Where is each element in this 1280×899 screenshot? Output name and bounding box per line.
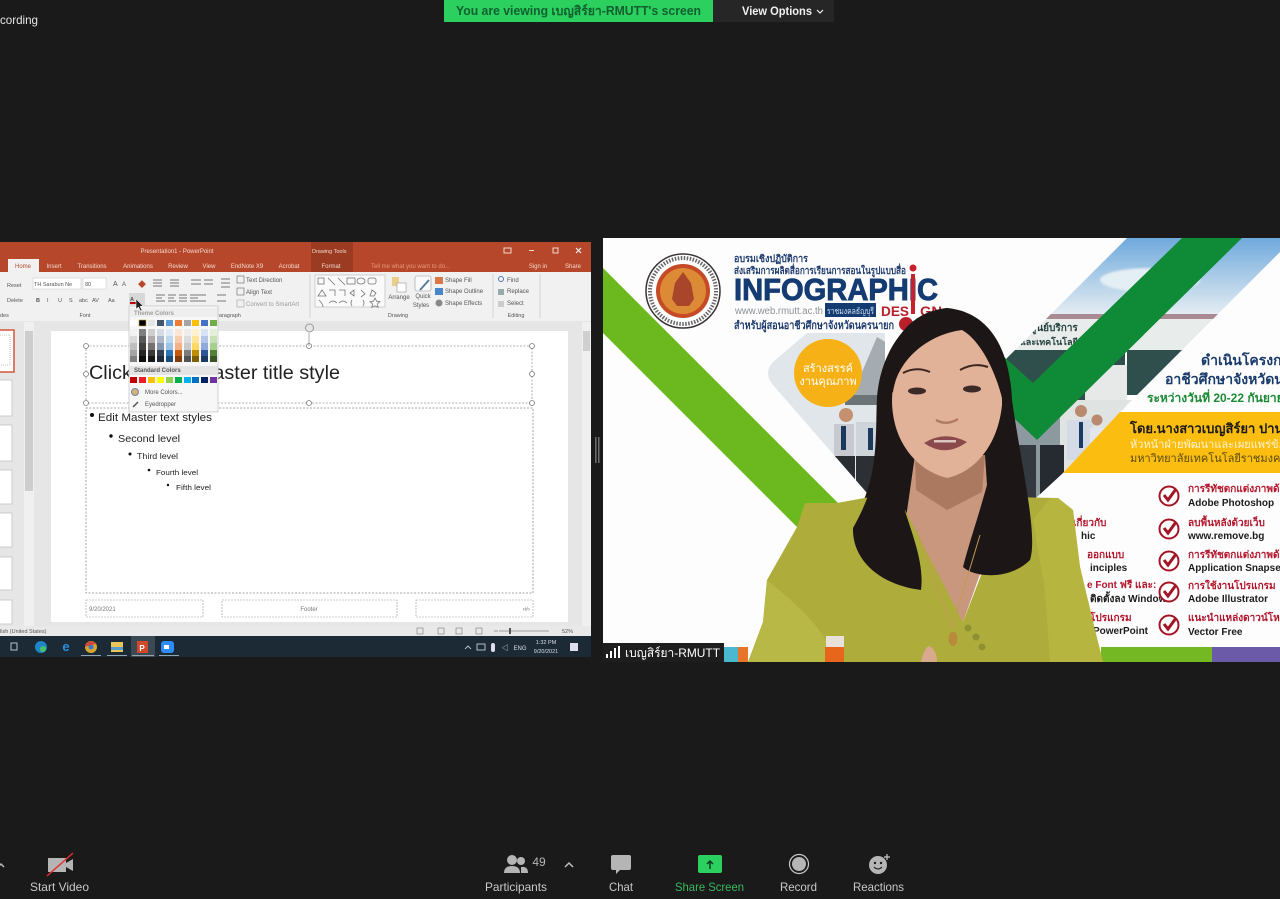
ribbon: Replace: [507, 289, 530, 295]
ribbon: AV: [92, 298, 99, 304]
participant name tag: เบญสิร์ยา-RMUTT: [625, 646, 721, 660]
toolbar: reactions: [853, 854, 904, 894]
toolbar: reactions: Reactions: [853, 880, 904, 894]
poster headline block: ส่งเสริมการผลิตสื่อการเรียนการสอนในรูปแบบสื่อ: [734, 263, 906, 278]
body placeholder: Fourth level: [156, 468, 198, 477]
body placeholder: [86, 408, 533, 593]
fringe: [884, 308, 1012, 400]
title bar and tabs: Share: [565, 264, 582, 270]
colour picker dropdown: More Colors...: [145, 390, 183, 396]
ribbon: Arrange: [388, 295, 410, 301]
poster topic list right column with check icons: ลบพื้นหลังด้วยเว็บ: [1188, 515, 1265, 529]
Windows taskbar: ENG: [513, 646, 527, 652]
paragraph icons: [153, 279, 230, 301]
title bar and tabs: Sign in: [529, 264, 547, 270]
colour picker dropdown: Theme Colors: [134, 311, 175, 317]
poster headline block: [734, 253, 942, 333]
neck and chest: [905, 455, 990, 622]
face: [892, 322, 1002, 478]
mouse cursor: [136, 299, 143, 311]
panel divider handle: [595, 437, 600, 463]
ribbon: Drawing: [388, 313, 408, 319]
theme colour row: [130, 320, 217, 326]
ribbon: Text Direction: [246, 278, 282, 284]
ribbon: des: [0, 313, 9, 319]
ribbon: U: [58, 298, 62, 304]
participant name tag: [603, 643, 724, 662]
poster college seal: [646, 254, 720, 328]
ribbon: TH Sarabun Ne: [34, 282, 72, 288]
footer placeholders: ‹#›: [523, 607, 530, 613]
poster photo band: building and students: [1006, 238, 1280, 498]
ribbon: Shape Fill: [445, 278, 472, 284]
title placeholder: [84, 324, 534, 406]
title bar and tabs: Format: [321, 264, 341, 270]
poster bottom colour strip: [724, 647, 1280, 662]
title bar and tabs: Home: [15, 264, 32, 270]
title bar and tabs: Review: [168, 264, 188, 270]
status bar: 52%: [562, 629, 573, 635]
toolbar: record: [780, 854, 817, 894]
ribbon: Paragraph: [215, 313, 241, 319]
Windows taskbar: P: [139, 644, 145, 653]
body placeholder: Fifth level: [176, 485, 212, 492]
toolbar: share screen: [675, 855, 744, 894]
poster topic list right column with check icons: Vector Free: [1188, 627, 1243, 638]
footer placeholders: Footer: [300, 607, 318, 613]
status bar: lish (United States): [0, 629, 47, 635]
title bar and tabs: [0, 242, 591, 272]
ribbon: Font: [79, 313, 91, 319]
Windows taskbar: e: [62, 639, 70, 654]
title bar and tabs: Animations: [123, 264, 153, 270]
toolbar: share screen: Share Screen: [675, 880, 744, 894]
poster topic list right column with check icons: [1160, 482, 1280, 638]
poster left photo with workers: [768, 333, 885, 492]
title bar and tabs: Tell me what you want to do...: [371, 264, 450, 270]
title bar and tabs: Insert: [46, 264, 62, 270]
hair back: [864, 308, 1002, 514]
body placeholder: Third level: [137, 451, 178, 461]
poster topic list left column: โปรแกรม: [1089, 611, 1132, 624]
poster topic list left column: ออกแบบ: [1087, 550, 1124, 561]
ribbon: Styles: [413, 303, 429, 309]
poster photo band: building and students: ศูนย์บริการ: [1030, 322, 1078, 335]
students in photo: [1019, 405, 1104, 498]
Windows taskbar: 1:32 PM: [536, 640, 557, 646]
poster yellow circle badge: งานคุณภาพ: [799, 376, 857, 388]
colour picker dropdown: [129, 306, 218, 412]
poster headline block: อบรมเชิงปฏิบัติการ: [734, 253, 809, 265]
poster topic list right column with check icons: www.remove.bg: [1187, 531, 1264, 542]
poster topic list left column: เกี่ยวกับ: [1073, 515, 1106, 529]
raised hand: [921, 646, 937, 662]
recording label: cording: [0, 13, 38, 27]
poster topic list right column with check icons: Adobe Illustrator: [1188, 594, 1268, 605]
poster yellow band: [1063, 412, 1280, 473]
ribbon: Align Text: [246, 290, 272, 296]
ribbon: [0, 272, 591, 321]
toolbar: participants: Participants: [485, 880, 547, 894]
ribbon: Reset: [7, 283, 22, 289]
poster topic list left column: hic: [1081, 531, 1096, 542]
poster topic list left column: e Font ฟรี และ:: [1087, 579, 1156, 591]
poster topic list right column with check icons: การใช้งานโปรแกรม: [1188, 579, 1276, 592]
ribbon: Select: [507, 301, 524, 307]
title bar and tabs: View: [203, 264, 216, 270]
thumbnail pane: [0, 322, 38, 626]
ribbon: Quick: [415, 294, 432, 300]
standard colour row: [130, 377, 217, 383]
poster headline block: DES: [881, 303, 909, 319]
Windows taskbar: 9/20/2021: [534, 649, 558, 655]
blouse buttons: [964, 624, 986, 650]
ribbon: abc: [79, 298, 88, 304]
ribbon: Delete: [7, 298, 23, 304]
right scrollbar: [582, 322, 591, 626]
ribbon: Shape Outline: [445, 289, 484, 295]
title placeholder: Click to edit Master title style: [89, 362, 340, 384]
necklace and pendant: [917, 530, 980, 646]
poster headline block: GN: [920, 303, 942, 319]
ribbon: Aa: [108, 298, 116, 304]
Windows taskbar: [0, 636, 591, 657]
poster project details: [1129, 351, 1280, 465]
body placeholder: Edit Master text styles: [98, 412, 213, 424]
poster topic list left column: PowerPoint: [1093, 626, 1149, 637]
viewing banner: View Options: [742, 4, 812, 18]
colour picker dropdown: Eyedropper: [145, 402, 176, 408]
toolbar: chat: Chat: [609, 880, 634, 894]
slide canvas: [51, 324, 568, 622]
toolbar: left caret: [0, 864, 4, 867]
poster headline block: www.web.rmutt.ac.th: [734, 306, 823, 317]
hair front locks: [852, 400, 922, 590]
toolbar: chat: [609, 855, 634, 894]
toolbar: participants: 49: [532, 855, 546, 869]
ribbon: 80: [85, 282, 91, 288]
title bar and tabs: Presentation1 - PowerPoint: [140, 249, 214, 255]
poster topic list left column: ติดตั้งลง Windows: [1090, 591, 1172, 605]
poster topic list right column with check icons: Adobe Photoshop: [1188, 498, 1274, 509]
ribbon: Editing: [508, 313, 524, 319]
ribbon: S: [69, 298, 73, 304]
theme colour shades: [130, 329, 217, 362]
ribbon: A: [113, 281, 118, 288]
toolbar: participants: [485, 855, 573, 894]
ribbon: B: [36, 298, 40, 304]
panel: presenter video with training poster: [603, 238, 1280, 662]
ribbon: Shape Effects: [445, 301, 482, 307]
viewing banner: You are viewing เบญสิร์ยา-RMUTT's screen: [456, 3, 701, 18]
poster headline block: สำหรับผู้สอนอาชีวศึกษาจังหวัดนครนายก: [734, 319, 894, 333]
viewing banner: [444, 0, 834, 22]
footer placeholders: [86, 600, 533, 617]
toolbar: start video: [30, 853, 89, 894]
ribbon: ◆: [138, 280, 146, 289]
sleeve gap with orange strip: [825, 636, 844, 662]
poster green diagonal band: [603, 268, 840, 527]
poster large dark green check mark: [995, 238, 1242, 440]
title bar and tabs: Acrobat: [279, 264, 300, 270]
poster topic list left column: inciples: [1090, 563, 1128, 574]
Windows taskbar: ◁: [502, 644, 508, 652]
facial features: [903, 365, 988, 450]
poster photo band: building and students: และเทคโนโลยี: [1020, 336, 1078, 347]
colour picker dropdown: Standard Colors: [134, 368, 181, 374]
title bar and tabs: Transitions: [77, 264, 107, 270]
toolbar: start video: Start Video: [30, 880, 89, 894]
shapes gallery: [315, 275, 385, 307]
ribbon: A: [130, 297, 134, 303]
footer placeholders: 9/20/2021: [89, 607, 116, 613]
panel: PowerPoint screen share: [0, 242, 591, 657]
ribbon: A: [122, 282, 126, 288]
toolbar: record: Record: [780, 880, 817, 894]
title bar and tabs: Drawing Tools: [312, 249, 347, 255]
body placeholder: Second level: [118, 434, 180, 445]
blouse: [748, 497, 1103, 662]
poster yellow circle badge: สร้างสรรค์: [803, 362, 853, 375]
ribbon: I: [47, 298, 49, 304]
poster headline block: INFOGRAPHIC: [734, 272, 938, 307]
ribbon: Find: [507, 278, 519, 284]
poster headline block: ราชมงคลธัญบุรี: [827, 306, 874, 317]
presenter: [748, 308, 1103, 662]
title bar and tabs: EndNote X9: [231, 264, 264, 270]
ribbon: Convert to SmartArt: [246, 302, 299, 308]
poster yellow circle badge: [794, 339, 862, 407]
poster topic list left column: [1074, 515, 1166, 634]
status bar: [0, 626, 591, 636]
